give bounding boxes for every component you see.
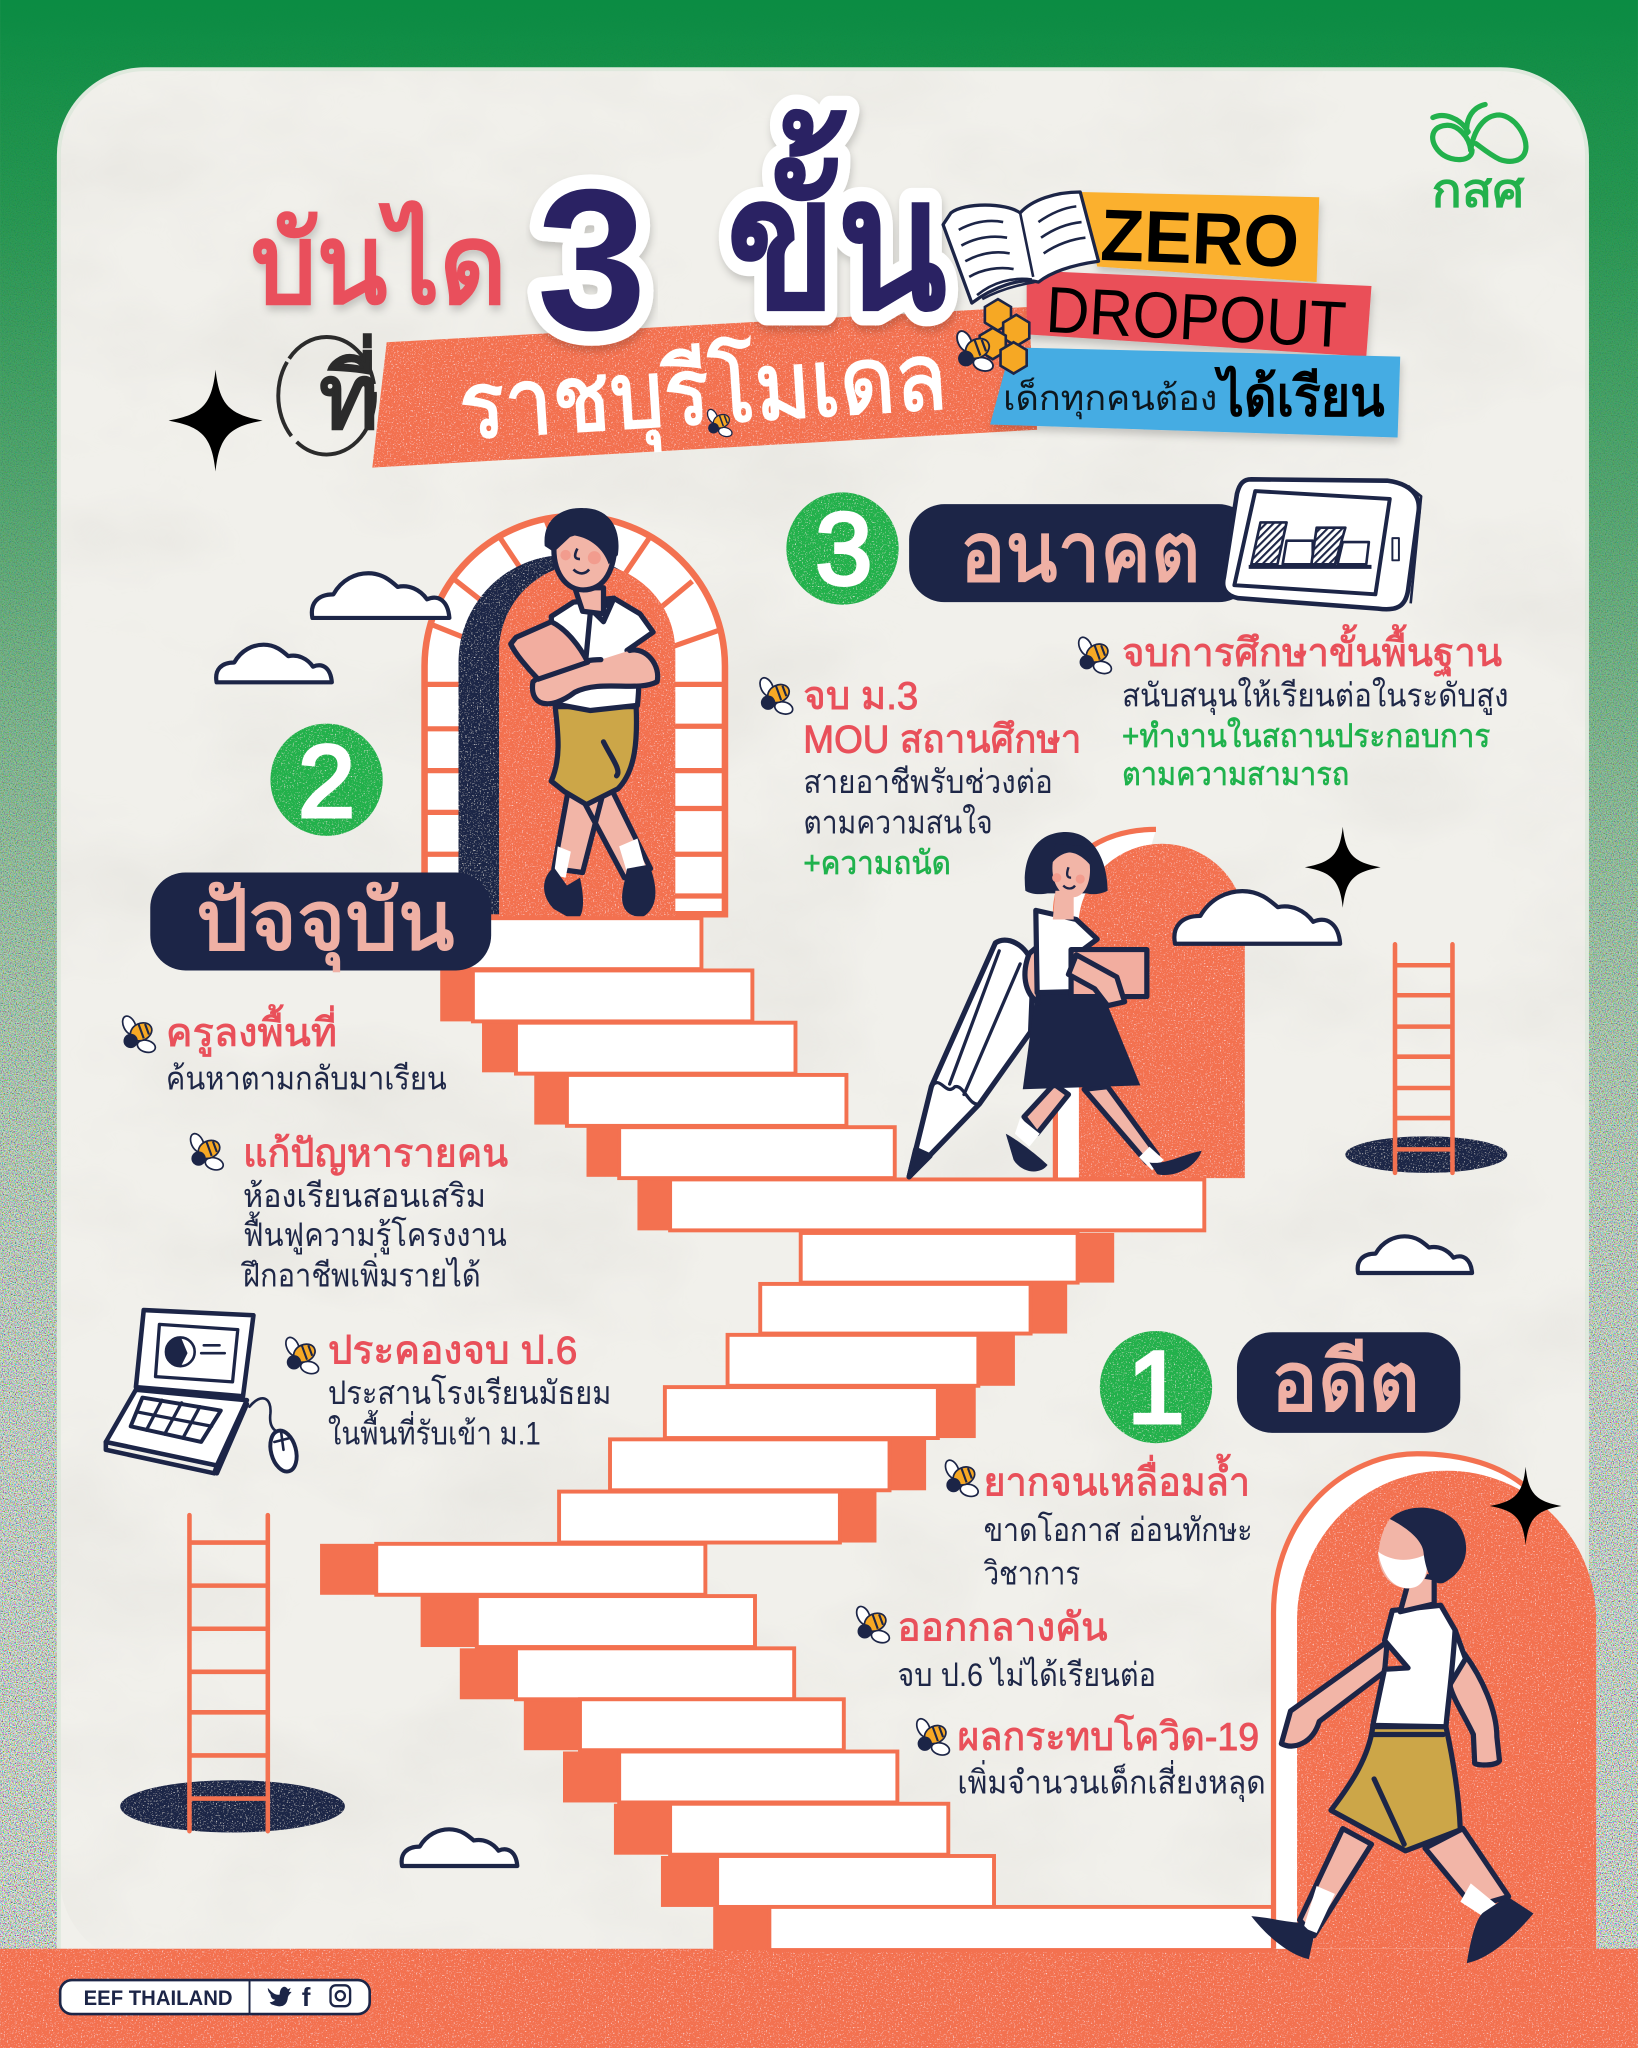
pill: past <box>1237 1332 1460 1433</box>
item: finish grade 6 <box>283 1330 611 1452</box>
item: finish basic education <box>1076 624 1509 792</box>
badge 2 <box>270 724 383 838</box>
badge 3: 3 <box>815 492 872 606</box>
item: teachers in the field: ค้นหาตามกลับมาเรียน <box>166 1059 447 1096</box>
item: covid impact: ผลกระทบโควิด-19 <box>957 1714 1259 1759</box>
item: solve individually: แก้ปัญหารายคน <box>243 1132 508 1175</box>
arch: past <box>1274 1454 1596 1949</box>
icon: facebook: f <box>302 1982 311 2012</box>
star: title <box>169 370 263 472</box>
zero dropout tags <box>990 192 1400 438</box>
cloud 2 <box>216 645 332 682</box>
student: present <box>511 508 658 921</box>
title number 3: 3 <box>537 147 647 372</box>
cloud over arch <box>1174 891 1340 944</box>
cloud 1 <box>312 573 449 618</box>
icon: open book <box>943 192 1099 303</box>
item: teachers in the field: ครูลงพื้นที่ <box>166 1004 337 1056</box>
icon: honeycomb and bee <box>954 299 1029 374</box>
badge 2: 2 <box>298 724 355 838</box>
tag: everyone must learn: ได้เรียน <box>1214 364 1385 427</box>
badge 1 <box>1100 1330 1212 1444</box>
item: finish basic education: ตามความสามารถ <box>1122 755 1349 792</box>
item: poverty: ยากจนเหลื่อมล้ำ <box>984 1454 1250 1505</box>
item: teachers in the field <box>120 1004 447 1096</box>
title word: stairs: บันได <box>251 201 507 327</box>
circled word <box>278 334 379 455</box>
footer social: EEF THAILAND <box>84 1987 233 2010</box>
tag: zero: ZERO <box>1099 195 1300 283</box>
item: finish basic education: +ทำงานในสถานประกอบการ <box>1122 717 1490 754</box>
item: finish grade 6: ประคองจบ ป.6 <box>328 1330 577 1373</box>
student: future with pencil <box>909 832 1202 1177</box>
item: finish grade 6: ประสานโรงเรียนมัธยม <box>328 1374 611 1411</box>
arch: future <box>1055 829 1245 1178</box>
item: finish grade 9: +ความถนัด <box>803 844 951 881</box>
arch: present <box>425 516 725 917</box>
icon: instagram <box>331 1985 350 2006</box>
star: future <box>1305 827 1381 908</box>
item: poverty <box>943 1454 1253 1591</box>
tag: everyone must learn: เด็กทุกคนต้อง <box>1003 377 1217 419</box>
item: solve individually: ฟื้นฟูความรู้โครงงาน <box>243 1211 507 1255</box>
item: solve individually <box>188 1131 508 1294</box>
student: past <box>1251 1508 1533 1963</box>
icon: twitter <box>268 1987 292 2006</box>
item: dropout: ออกกลางคัน <box>897 1606 1108 1649</box>
cloud bottom <box>402 1829 517 1866</box>
item: dropout <box>854 1604 1156 1693</box>
item: covid impact: เพิ่มจำนวนเด็กเสี่ยงหลุด <box>957 1759 1266 1802</box>
item: poverty: วิชาการ <box>984 1554 1080 1591</box>
ladder: right with hole <box>1345 944 1507 1173</box>
item: dropout: จบ ป.6 ไม่ได้เรียนต่อ <box>897 1656 1156 1693</box>
clouds upper <box>216 573 449 682</box>
item: solve individually: ห้องเรียนสอนเสริม <box>243 1177 486 1214</box>
pill: past: อดีต <box>1271 1335 1420 1429</box>
footer social <box>60 1980 370 2014</box>
ribbon <box>372 307 1037 468</box>
item: finish grade 9: จบ ม.3 <box>803 675 918 718</box>
badge 3 <box>786 492 899 606</box>
item: finish grade 6: ในพื้นที่รับเข้า ม.1 <box>328 1410 541 1452</box>
item: poverty: ขาดโอกาส อ่อนทักษะ <box>984 1511 1253 1548</box>
badge 1: 1 <box>1128 1330 1184 1444</box>
tag: everyone must learn <box>990 347 1400 438</box>
stairs <box>320 918 1274 1950</box>
cloud right <box>1358 1236 1472 1273</box>
item: solve individually: ฝึกอาชีพเพิ่มรายได้ <box>241 1253 481 1294</box>
item: finish grade 9 <box>757 675 1082 881</box>
pill: present: ปัจจุบัน <box>196 874 455 972</box>
item: covid impact <box>914 1714 1266 1802</box>
title <box>251 108 1037 468</box>
tag: dropout: DROPOUT <box>1044 273 1348 361</box>
item: finish grade 9: MOU สถานศึกษา <box>803 718 1082 761</box>
pill: future: อนาคต <box>960 505 1200 599</box>
icon: tablet <box>1223 479 1421 609</box>
item: finish grade 9: ตามความสนใจ <box>803 803 993 840</box>
circled word: ที่ <box>319 334 379 448</box>
icon: laptop <box>106 1310 301 1474</box>
logo: กสศ <box>1432 163 1524 216</box>
title word: steps: ขั้น <box>726 108 947 348</box>
item: finish basic education: สนับสนุนให้เรียนต่อในระดับสูง <box>1122 677 1509 716</box>
star: past <box>1490 1467 1562 1545</box>
bottom band <box>0 1949 1638 2048</box>
item: finish basic education: จบการศึกษาขั้นพื้นฐาน <box>1122 624 1502 676</box>
ladder: left with hole <box>120 1515 345 1832</box>
bee on ribbon <box>705 408 733 438</box>
ribbon text: ราชบุรีโมเดล <box>456 323 950 464</box>
item: finish grade 9: สายอาชีพรับช่วงต่อ <box>803 763 1053 800</box>
logo <box>1432 104 1526 216</box>
upper flight side blocks <box>440 970 479 1021</box>
pencil <box>909 940 1033 1177</box>
